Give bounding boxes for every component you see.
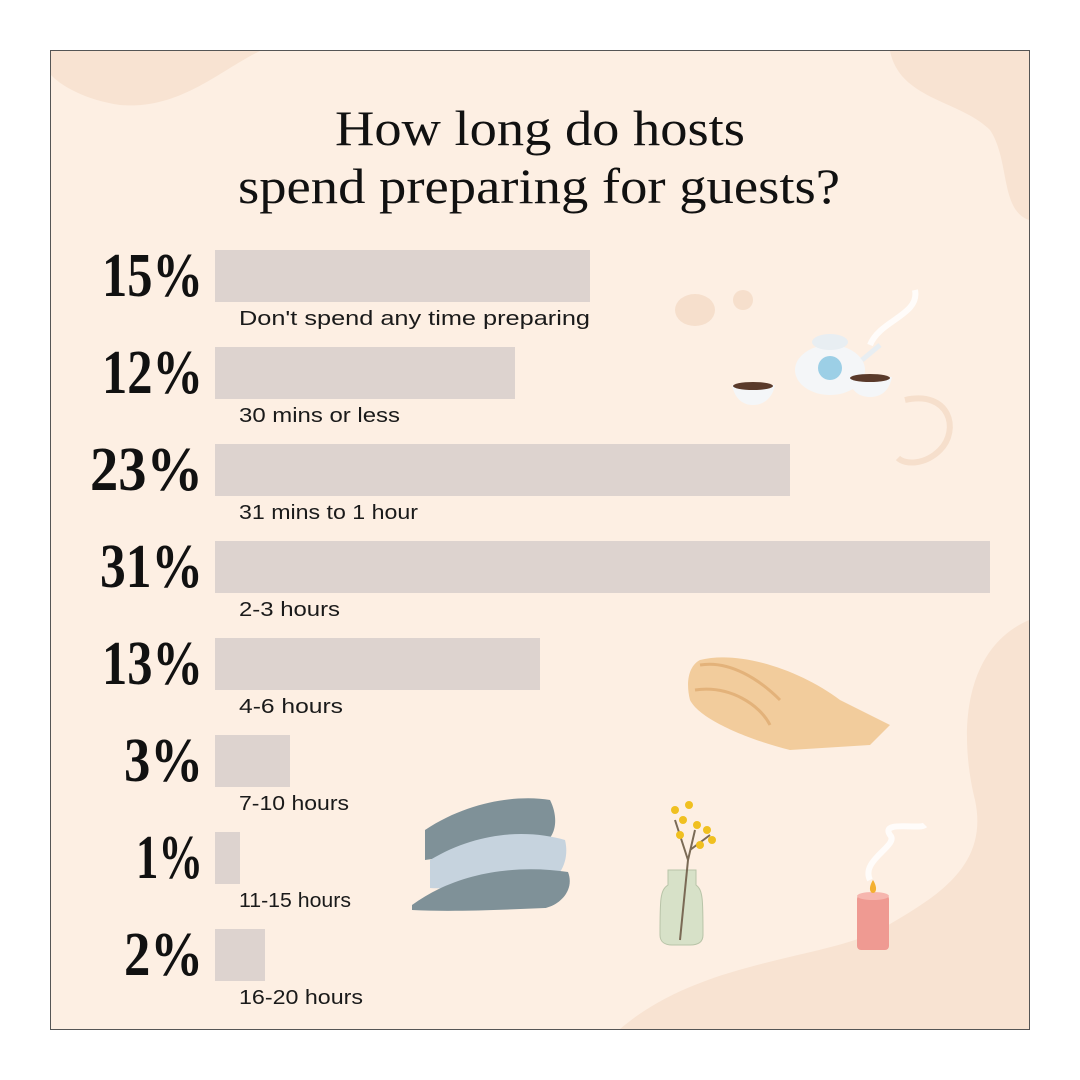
row: 23%: 23%	[90, 436, 203, 504]
title: How long do hosts	[335, 100, 745, 156]
row: 13%: 4-6 hours	[239, 696, 343, 718]
row: 12%: 30 mins or less	[239, 405, 400, 427]
row: 3%: 3%	[124, 727, 203, 795]
row: 3%	[124, 727, 349, 815]
icon: candle	[857, 825, 925, 950]
row: 31%	[100, 533, 990, 621]
bar chart	[90, 242, 990, 1009]
row: 15%: 15%	[102, 242, 203, 310]
row: 2%: 2%	[124, 921, 203, 989]
row: 12%	[102, 339, 515, 427]
row: 1%: 11-15 hours	[239, 890, 351, 912]
icon: flower vase	[660, 801, 716, 945]
row: 23%: 31 mins to 1 hour	[239, 502, 418, 524]
row: 15%	[102, 242, 590, 330]
row: 13%: 13%	[102, 630, 203, 698]
title	[238, 100, 840, 214]
row: 31%: 2-3 hours	[239, 599, 340, 621]
row: 1%: 1%	[136, 824, 203, 892]
row: 1%	[136, 824, 351, 912]
icon: folded blanket	[688, 657, 890, 750]
row: 31%: 31%	[100, 533, 203, 601]
row: 13%	[102, 630, 540, 718]
row: 12%: 12%	[102, 339, 203, 407]
row: 2%: 16-20 hours	[239, 987, 363, 1009]
row: 15%: Don't spend any time preparing	[239, 308, 590, 330]
title: spend preparing for guests?	[238, 158, 840, 214]
row: 2%	[124, 921, 363, 1009]
row: 23%	[90, 436, 790, 524]
icon: pillows	[412, 798, 570, 911]
icon: tea set	[675, 290, 950, 463]
row: 3%: 7-10 hours	[239, 793, 349, 815]
